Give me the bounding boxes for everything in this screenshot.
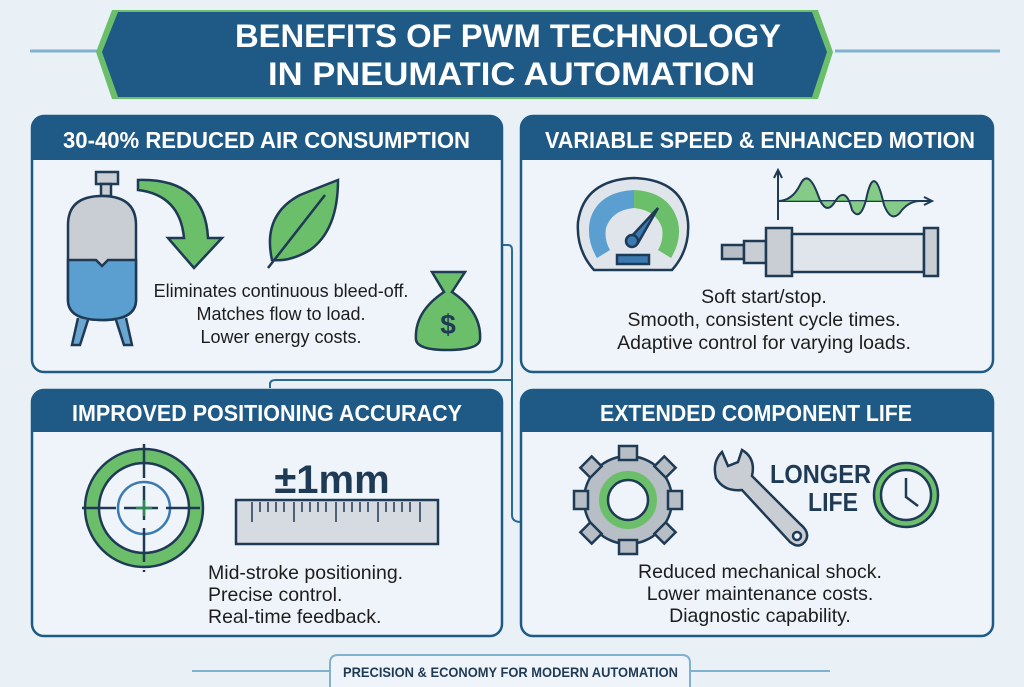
text: longer life: LIFE: [808, 487, 858, 517]
panel: reduced air consumption: [32, 116, 502, 372]
chart: motion wave: [774, 170, 932, 220]
text block: Mid-stroke positioning.: [208, 562, 403, 584]
icon: gauge: [578, 178, 688, 270]
title banner: BENEFITS OF PWM TECHNOLOGY: [235, 18, 781, 54]
text block: Lower maintenance costs.: [647, 583, 873, 605]
icon: pneumatic cylinder: [722, 228, 938, 276]
icon: target: [82, 444, 206, 572]
title banner: [96, 10, 833, 99]
text block: Soft start/stop.: [701, 286, 827, 308]
text block: Real-time feedback.: [208, 606, 381, 628]
panel: component life: [521, 390, 993, 636]
heading: IMPROVED POSITIONING ACCURACY: [72, 400, 462, 426]
text block: Matches flow to load.: [196, 304, 366, 324]
text block: Eliminates continuous bleed-off.: [154, 281, 408, 301]
text block: Smooth, consistent cycle times.: [627, 309, 901, 331]
panel: variable speed: [521, 116, 993, 372]
text: longer life: LONGER: [770, 459, 871, 489]
icon: ruler: [236, 500, 438, 544]
icon: down arrow: [138, 180, 222, 268]
text block: Lower energy costs.: [200, 327, 362, 347]
icon: money bag: $: [440, 309, 456, 340]
heading: VARIABLE SPEED & ENHANCED MOTION: [545, 127, 975, 153]
icon: wrench: [715, 450, 807, 546]
footer tagline: [330, 655, 690, 687]
panel: positioning accuracy: [32, 390, 502, 636]
text block: Precise control.: [208, 584, 342, 606]
icon: air tank: [68, 172, 136, 345]
text block: Reduced mechanical shock.: [638, 561, 882, 583]
footer tagline: PRECISION & ECONOMY FOR MODERN AUTOMATION: [343, 664, 678, 680]
icon: clock: [874, 463, 938, 527]
heading: EXTENDED COMPONENT LIFE: [600, 400, 912, 426]
title banner: IN PNEUMATIC AUTOMATION: [268, 56, 755, 92]
icon: money bag: [416, 272, 480, 350]
text block: Diagnostic capability.: [669, 605, 851, 627]
icon: leaf: [268, 180, 338, 268]
text block: Adaptive control for varying loads.: [617, 332, 911, 354]
heading: 30-40% REDUCED AIR CONSUMPTION: [63, 127, 470, 153]
text: ±1mm: ±1mm: [274, 458, 390, 502]
icon: gear: [574, 446, 682, 554]
